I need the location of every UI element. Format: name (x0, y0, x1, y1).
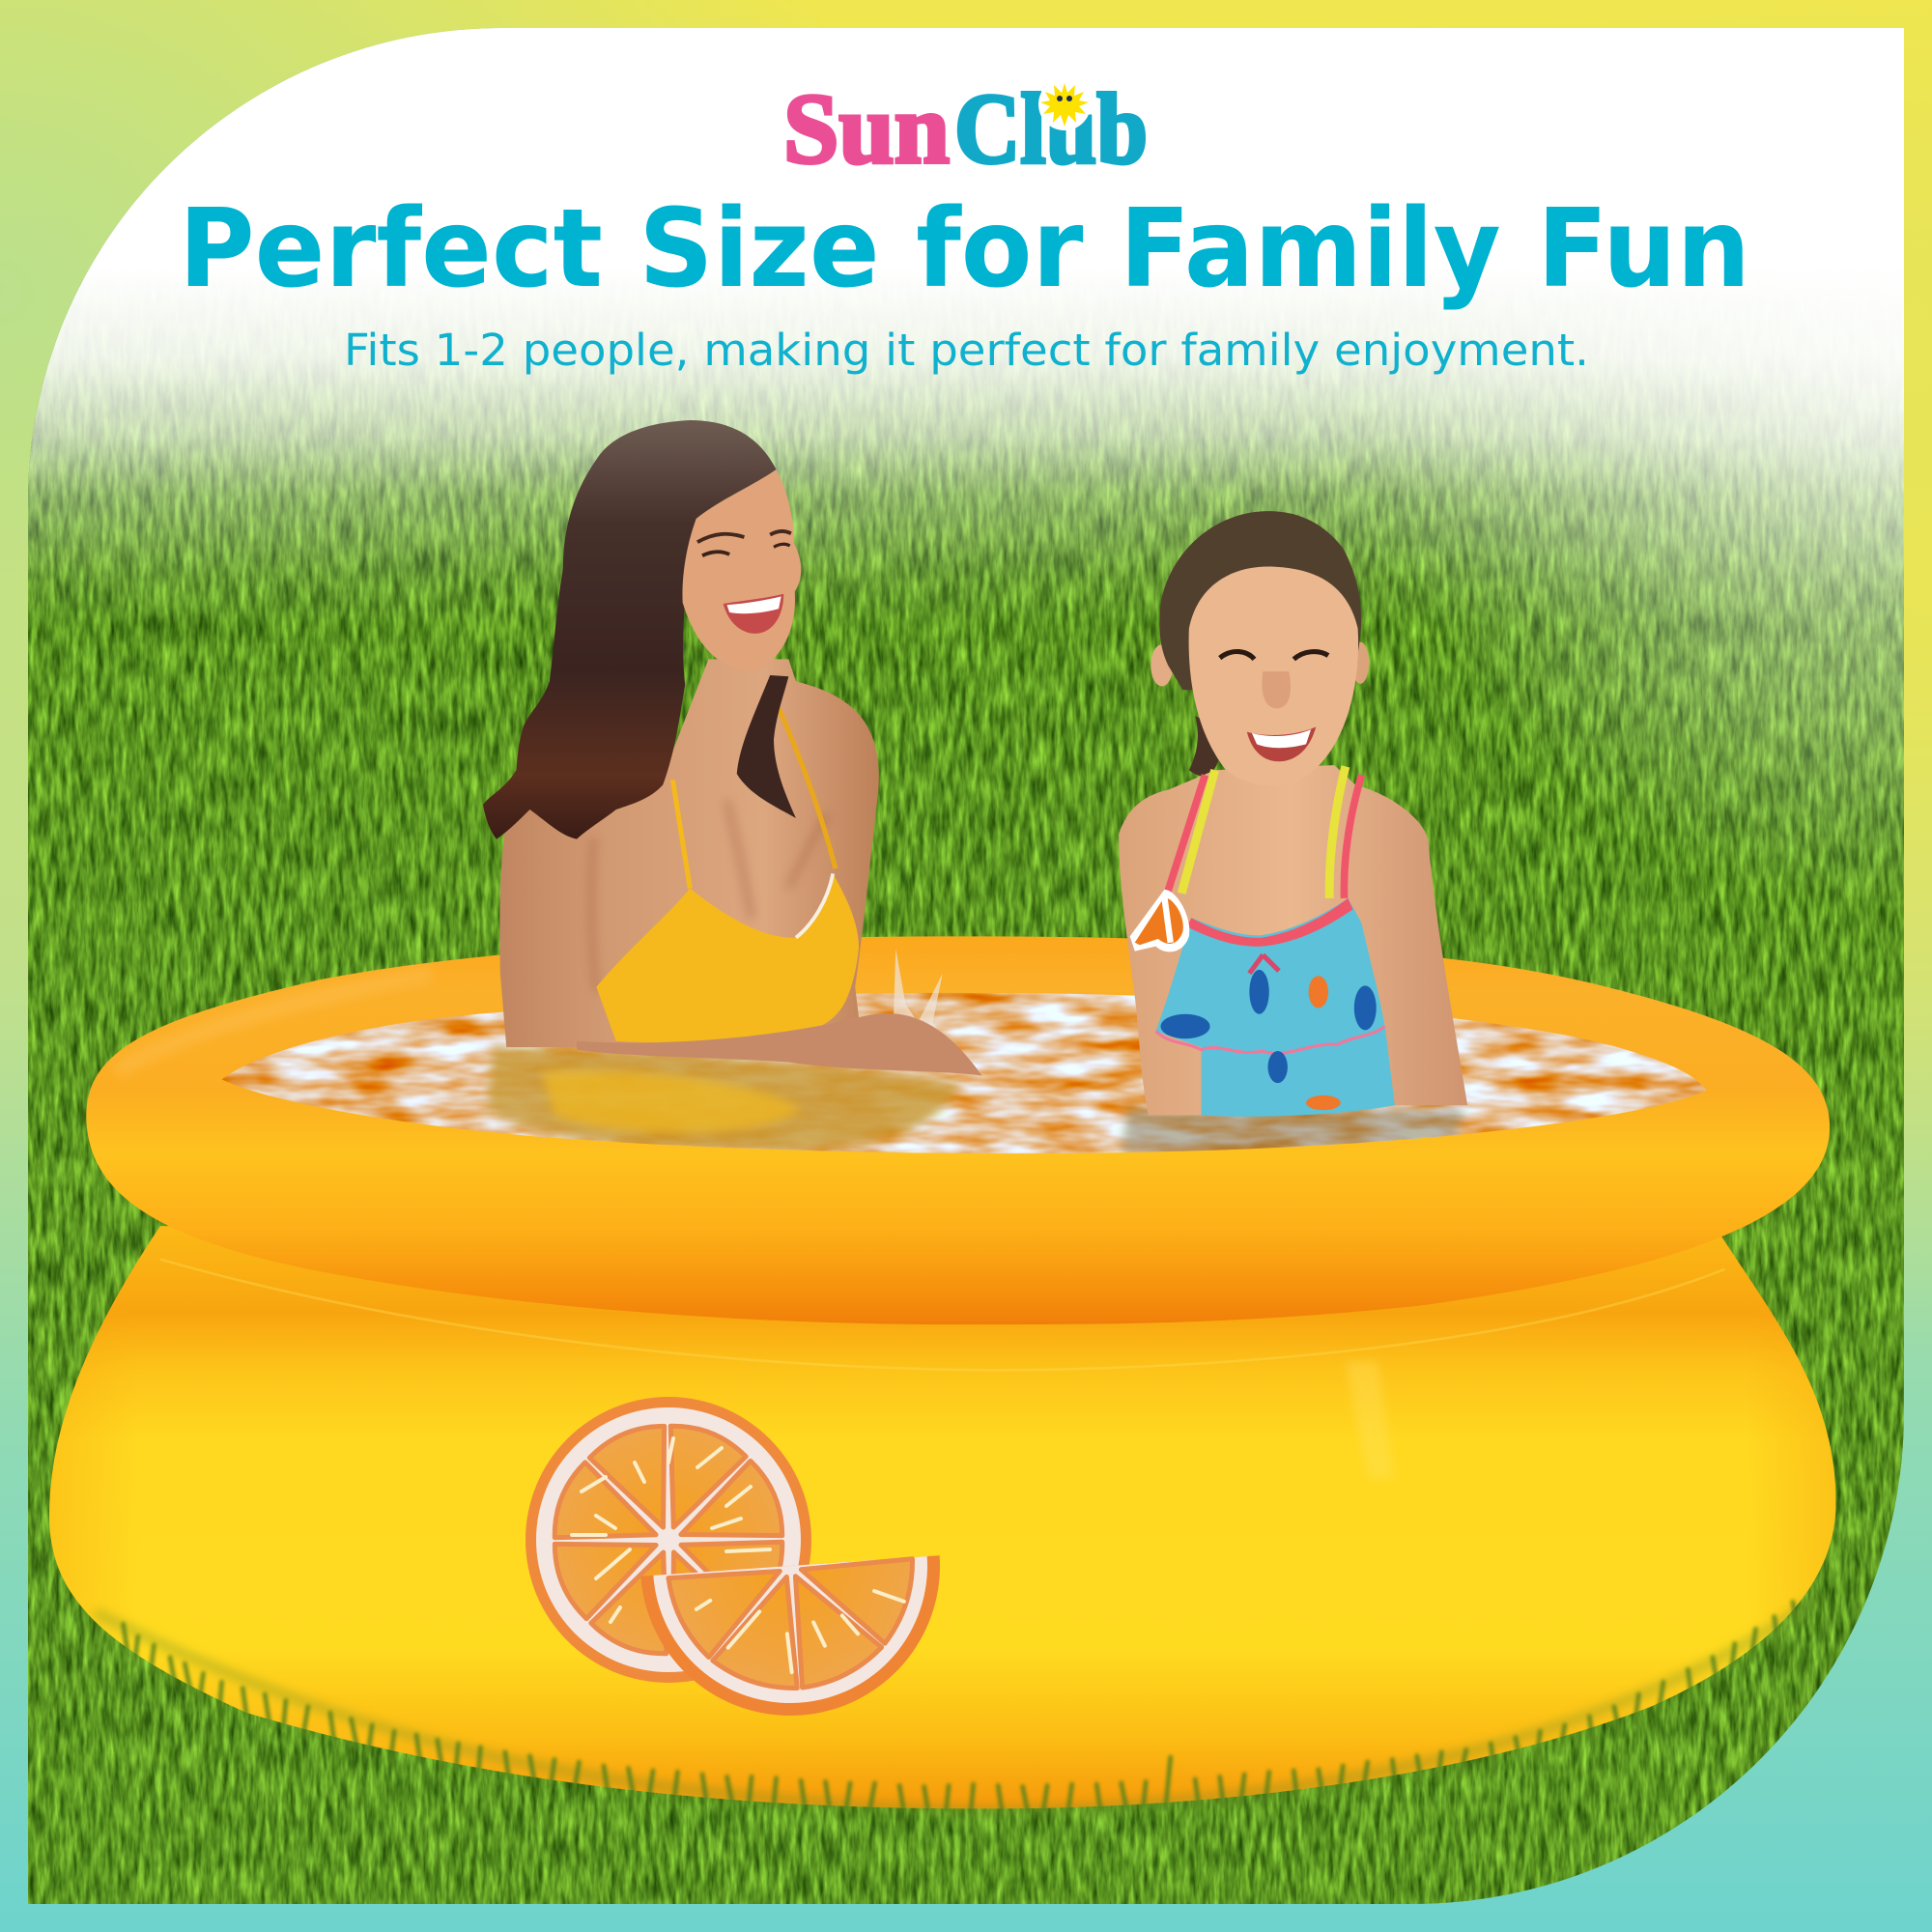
title: Perfect Size for Family Fun (179, 186, 1750, 312)
pool rim (86, 936, 1830, 1324)
girl body (1119, 765, 1467, 1115)
logo: SunClub: Club (954, 73, 1148, 185)
woman bikini (596, 708, 859, 1043)
subtitle: Fits 1-2 people, making it perfect for family enjoyment. (344, 325, 1589, 376)
nemo badge (1130, 890, 1189, 952)
woman front hair (737, 675, 796, 818)
woman hair back (483, 420, 777, 839)
woman body (499, 659, 879, 1047)
logo: SunClub (783, 73, 1148, 185)
rim highlight (117, 974, 431, 1072)
swimsuit fish prints (1161, 1014, 1210, 1038)
woman (483, 420, 982, 1076)
reflection of woman (487, 1047, 961, 1152)
girl face (1151, 511, 1369, 786)
woman face (682, 469, 801, 671)
scene: pool with woman and girl (49, 420, 1835, 1808)
girl braid (1189, 716, 1220, 776)
woman body shadows (591, 801, 828, 992)
woman forearm and hand (577, 1013, 982, 1076)
white fade at top (28, 28, 1904, 627)
right side haze (1424, 317, 1904, 881)
girl (1119, 511, 1467, 1117)
splash (894, 949, 980, 1074)
pool body (49, 1226, 1835, 1808)
icon: smiling sun (1038, 78, 1091, 130)
reflection of girl (1122, 1109, 1466, 1156)
water (222, 993, 1706, 1153)
whole orange (526, 1397, 811, 1683)
orange slices print (526, 1397, 950, 1725)
woman smile (724, 594, 783, 634)
orange half slice (641, 1555, 940, 1716)
girl swimsuit (1155, 766, 1395, 1117)
logo: SunClub: Sun (783, 73, 950, 185)
grass blades over pool base (99, 1602, 1811, 1811)
